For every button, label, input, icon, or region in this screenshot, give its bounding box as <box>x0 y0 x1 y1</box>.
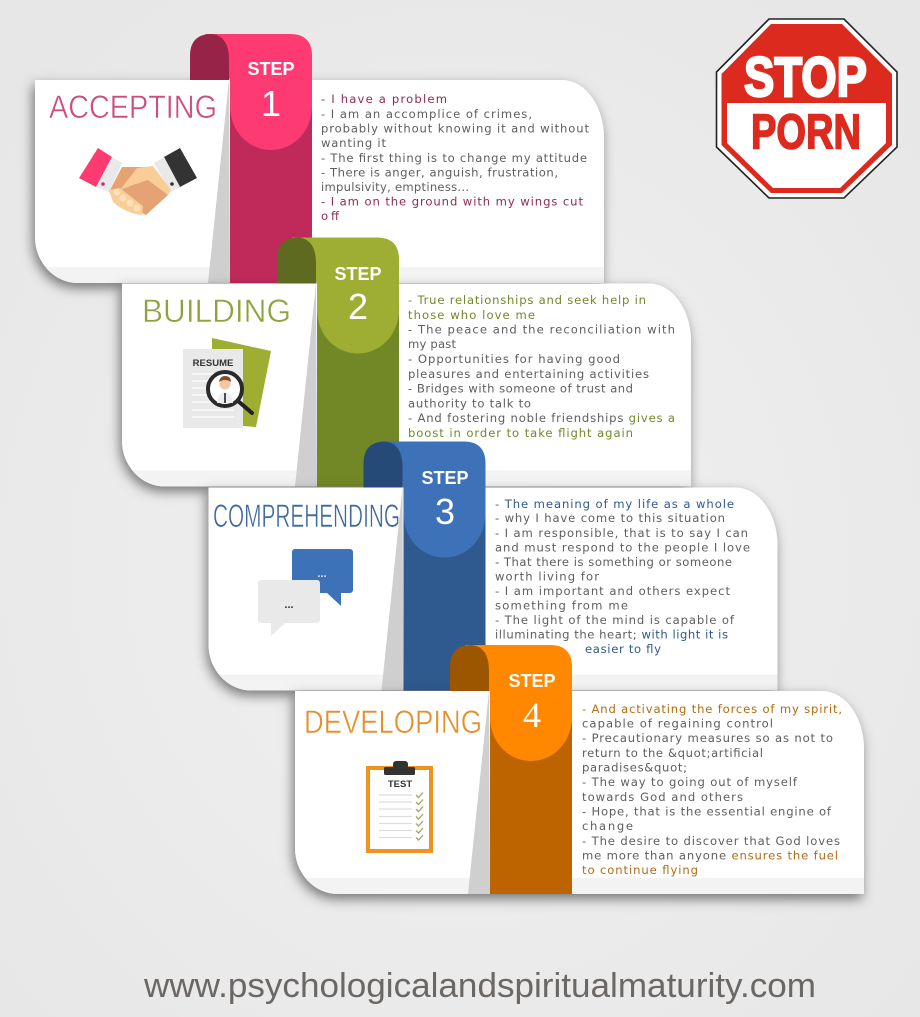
text block 2: - And fostering noble friendships gives a <box>408 411 675 425</box>
text block 3: worth living for <box>495 570 599 584</box>
text block 3: - The light of the mind is capable of <box>495 613 735 627</box>
text block 2: my past <box>408 337 456 351</box>
text block 2: those who love me <box>408 308 535 322</box>
card 3 <box>208 488 778 690</box>
step 1 number: 1 <box>261 83 281 124</box>
ribbon 3 <box>364 442 486 690</box>
card 4 <box>295 691 864 894</box>
text block 2: pleasures and entertaining activities <box>408 367 649 381</box>
text block 1: - There is anger, anguish, frustration, <box>321 166 558 180</box>
text block 4: me more than anyone ensures the fuel <box>582 848 838 862</box>
footer website url: www.psychologicalandspiritualmaturity.com <box>143 967 816 1005</box>
text block 1: - I have a problem <box>321 92 447 106</box>
text block 3: easier to fly <box>585 642 661 656</box>
text block 4: - Hope, that is the essential engine of <box>582 804 832 818</box>
icon: handshake <box>79 148 197 215</box>
text block 1: - I am an accomplice of crimes, <box>321 107 532 121</box>
text block 4: - And activating the forces of my spirit, <box>582 702 842 716</box>
text block 1: probably without knowing it and without <box>321 122 589 136</box>
text block 2: boost in order to take flight again <box>408 426 633 440</box>
icon: stop sign: PORN <box>751 106 861 160</box>
text block 3: - I am important and others expect <box>495 584 730 598</box>
heading: building: BUILDING <box>142 293 291 329</box>
text block 3: - That there is something or someone <box>495 555 732 569</box>
text block 3: - I am responsible, that is to say I can <box>495 526 748 540</box>
ribbon 4 <box>450 645 572 894</box>
text block 3: and must respond to the people I love <box>495 540 750 554</box>
text block 4: - Precautionary measures so as not to <box>582 731 833 745</box>
icon: test clipboard <box>368 761 431 851</box>
text block 3: - The meaning of my life as a whole <box>495 497 734 511</box>
text block 1: - I am on the ground with my wings cut <box>321 194 583 208</box>
text block 4: to continue flying <box>582 863 698 877</box>
icon: resume: RESUME <box>193 358 233 369</box>
icon: stop sign: STOP <box>744 45 867 108</box>
text block 4: - The desire to discover that God loves <box>582 834 840 848</box>
text block 3 <box>495 497 750 656</box>
text block 2: authority to talk to <box>408 396 531 410</box>
text block 2 <box>408 293 675 440</box>
step 3 number: 3 <box>435 491 455 532</box>
ribbon 1 <box>190 34 312 283</box>
panel: step 4 developing <box>295 645 864 894</box>
text block 4 <box>582 702 842 877</box>
card 2 <box>122 284 691 486</box>
step 1 label: STEP <box>247 59 295 79</box>
step 4 label: STEP <box>508 671 556 691</box>
step 4 number: 4 <box>523 695 541 735</box>
card 1 <box>35 80 604 283</box>
text block 1 <box>321 92 589 223</box>
text block 4: towards God and others <box>582 790 743 804</box>
text block 2: - Opportunities for having good <box>408 352 620 366</box>
text block 3: something from me <box>495 598 628 612</box>
text block 1: - The first thing is to change my attitude <box>321 151 587 165</box>
text block 4: change <box>582 819 633 833</box>
icon: speech bubbles: ... <box>284 599 294 611</box>
text block 1: off <box>321 209 340 223</box>
step 3 label: STEP <box>421 468 469 488</box>
heading: accepting: ACCEPTING <box>49 89 217 125</box>
panel: step 2 building <box>122 238 691 486</box>
step 2 number: 2 <box>348 286 368 327</box>
text block 4: return to the &quot;artificial <box>582 746 763 760</box>
ribbon 2 <box>277 238 399 486</box>
icon: speech bubbles: ... <box>317 568 327 580</box>
icon: speech bubbles <box>258 549 353 636</box>
icon: stop sign <box>716 19 897 198</box>
text block 1: wanting it <box>321 136 386 150</box>
icon: test clipboard: TEST <box>388 779 412 790</box>
text block 3: - why I have come to this situation <box>495 511 725 525</box>
step 2 label: STEP <box>334 264 382 284</box>
text block 2: - True relationships and seek help in <box>408 293 646 307</box>
text block 2: - Bridges with someone of trust and <box>408 382 633 396</box>
panel: step 3 comprehending <box>208 442 778 690</box>
icon: resume <box>183 338 271 428</box>
text block 1: impulsivity, emptiness... <box>321 180 469 194</box>
heading: developing: DEVELOPING <box>304 704 482 740</box>
text block 2: - The peace and the reconciliation with <box>408 322 675 336</box>
heading: comprehending: COMPREHENDING <box>213 498 400 534</box>
text block 3: illuminating the heart; with light it is <box>495 628 728 642</box>
text block 4: - The way to going out of myself <box>582 775 798 789</box>
text block 4: paradises&quot; <box>582 760 687 774</box>
panel: step 1 accepting <box>35 34 604 283</box>
text block 4: capable of regaining control <box>582 716 773 730</box>
